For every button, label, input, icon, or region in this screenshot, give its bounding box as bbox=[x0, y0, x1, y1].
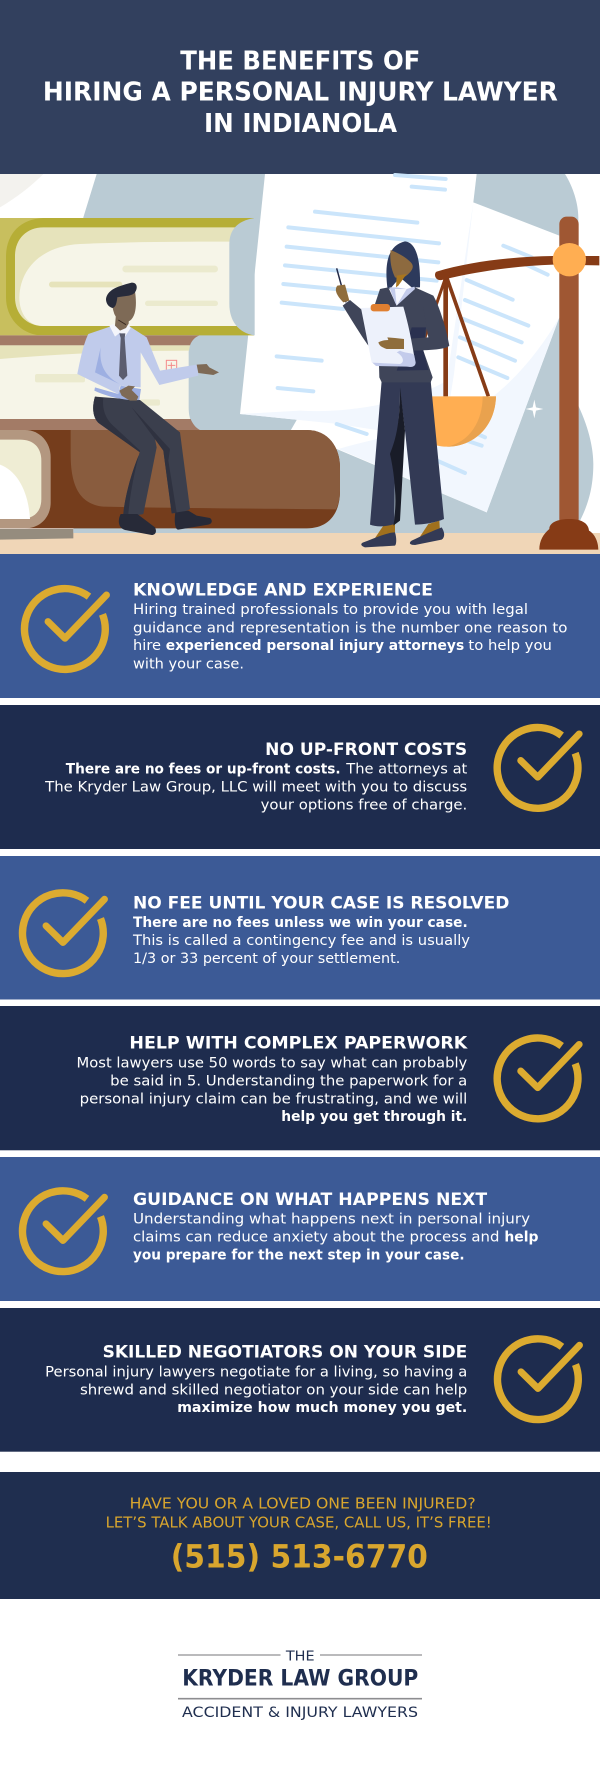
logo: the kryder law group: THE bbox=[285, 1648, 315, 1664]
call to action text: LET’S TALK ABOUT YOUR CASE, CALL US, IT’S FREE! bbox=[106, 1513, 492, 1531]
text block: knowledge and experience: Hiring trained professionals to provide you with legal bbox=[133, 601, 528, 618]
text block: knowledge and experience: hire bbox=[133, 637, 161, 654]
icon: check mark in circle bbox=[497, 728, 579, 808]
floor bbox=[0, 533, 600, 554]
logo: the kryder law group bbox=[178, 1648, 422, 1721]
text block: guidance: help bbox=[504, 1228, 538, 1245]
title bbox=[43, 47, 558, 139]
text block: negotiators: maximize how much money you get. bbox=[177, 1399, 467, 1416]
text block: negotiators bbox=[45, 1343, 467, 1416]
text block: guidance bbox=[133, 1190, 538, 1263]
text block: no up-front costs: The attorneys at bbox=[345, 760, 468, 777]
text block: no up-front costs: NO UP-FRONT COSTS bbox=[265, 740, 467, 760]
text block: no fee until resolved: 1/3 or 33 percent of your settlement. bbox=[133, 950, 400, 967]
middle book bbox=[0, 335, 200, 430]
call to action text bbox=[106, 1494, 492, 1531]
text block: no up-front costs: There are no fees or up-front costs. bbox=[66, 760, 341, 777]
panel: help with complex paperwork bbox=[0, 1006, 600, 1150]
panel: call to action bbox=[0, 1472, 600, 1599]
text block: complex paperwork: HELP WITH COMPLEX PAPERWORK bbox=[129, 1034, 468, 1054]
title: THE BENEFITS OF bbox=[180, 47, 420, 77]
woman lawyer holding clipboard bbox=[336, 241, 449, 547]
call to action text: HAVE YOU OR A LOVED ONE BEEN INJURED? bbox=[130, 1494, 476, 1512]
text block: knowledge and experience: to help you bbox=[468, 637, 552, 654]
text block: negotiators: SKILLED NEGOTIATORS ON YOUR SIDE bbox=[103, 1343, 467, 1363]
text block: guidance: you prepare for the next step in your case. bbox=[133, 1246, 465, 1263]
documents bbox=[240, 174, 559, 512]
text block: negotiators: shrewd and skilled negotiator on your side can help bbox=[80, 1381, 467, 1398]
man in shirt and tie sitting on books bbox=[77, 283, 219, 535]
sparkle bbox=[526, 400, 543, 418]
logo: the kryder law group: ACCIDENT & INJURY LAWYERS bbox=[182, 1705, 418, 1721]
text block: guidance: claims can reduce anxiety about the process and bbox=[133, 1228, 499, 1245]
scales of justice bbox=[425, 217, 599, 550]
text block: knowledge and experience: KNOWLEDGE AND EXPERIENCE bbox=[133, 581, 433, 601]
bottom book bbox=[0, 430, 340, 528]
text block: no up-front costs: your options free of charge. bbox=[261, 796, 467, 813]
text block: knowledge and experience: guidance and representation is the number one reason to bbox=[133, 619, 568, 636]
icon: check mark in circle bbox=[24, 589, 106, 669]
panel: skilled negotiators on your side bbox=[0, 1308, 600, 1452]
text block: no up-front costs bbox=[44, 740, 468, 813]
stack of law books bbox=[0, 218, 340, 528]
top book bbox=[0, 218, 254, 335]
text block: knowledge and experience: experienced personal injury attorneys bbox=[166, 637, 464, 654]
illustration: lawyer and client with law books and scales bbox=[0, 174, 600, 554]
text block: complex paperwork: help you get through it. bbox=[281, 1108, 467, 1125]
panel: guidance on what happens next bbox=[0, 1157, 600, 1301]
icon: check mark in circle bbox=[22, 1191, 104, 1272]
icon: check mark in circle bbox=[22, 893, 104, 974]
text block: no fee until resolved bbox=[132, 894, 509, 967]
text block: negotiators: Personal injury lawyers negotiate for a living, so having a bbox=[45, 1363, 467, 1380]
text block: guidance: Understanding what happens next in personal injury bbox=[133, 1210, 530, 1227]
text block: no fee until resolved: This is called a contingency fee and is usually bbox=[132, 932, 470, 949]
title: HIRING A PERSONAL INJURY LAWYER bbox=[43, 78, 558, 108]
panel: no fee until your case is resolved bbox=[0, 856, 600, 1000]
logo: the kryder law group: KRYDER LAW GROUP bbox=[182, 1665, 418, 1691]
text block: complex paperwork bbox=[76, 1034, 468, 1125]
text block: no up-front costs: The Kryder Law Group, LLC will meet with you to discuss bbox=[44, 778, 467, 795]
panel: knowledge and experience bbox=[0, 554, 600, 698]
header panel with title bbox=[0, 0, 600, 174]
icon: check mark in circle bbox=[497, 1038, 579, 1119]
phone number: (515) 513-6770 bbox=[171, 1537, 428, 1575]
text block: knowledge and experience bbox=[133, 581, 568, 672]
title: IN INDIANOLA bbox=[204, 109, 397, 139]
text block: guidance: GUIDANCE ON WHAT HAPPENS NEXT bbox=[133, 1190, 488, 1210]
text block: complex paperwork: personal injury claim can be frustrating, and we will bbox=[80, 1090, 467, 1107]
text block: knowledge and experience: with your case. bbox=[133, 655, 244, 672]
text block: complex paperwork: be said in 5. Understanding the paperwork for a bbox=[110, 1072, 467, 1089]
icon: check mark in circle bbox=[497, 1339, 580, 1420]
text block: no fee until resolved: NO FEE UNTIL YOUR CASE IS RESOLVED bbox=[133, 894, 509, 914]
small marker icon bbox=[166, 360, 177, 371]
panel: no up-front costs bbox=[0, 705, 600, 849]
text block: complex paperwork: Most lawyers use 50 words to say what can probably bbox=[76, 1054, 468, 1071]
text block: no fee until resolved: There are no fees unless we win your case. bbox=[133, 914, 468, 931]
